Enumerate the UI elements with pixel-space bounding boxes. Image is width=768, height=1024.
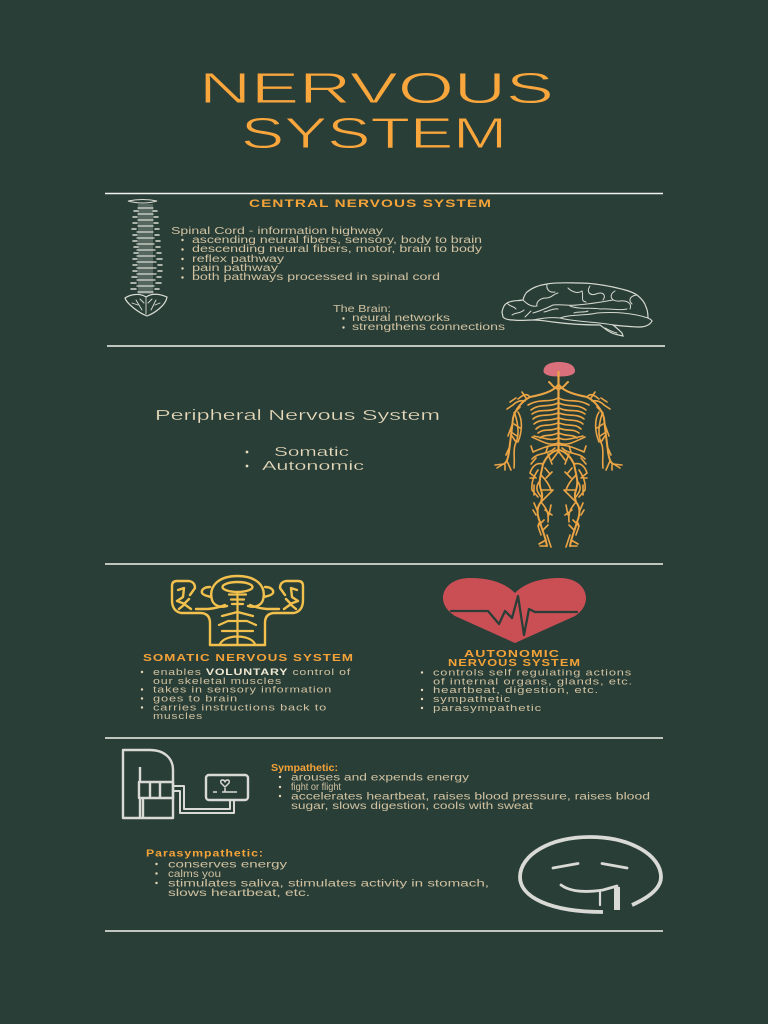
list: somatic and autonomic: Somatic (274, 444, 350, 459)
list: autonomic details: heartbeat, digestion, etc. (433, 685, 599, 696)
list: somatic and autonomic (246, 444, 365, 473)
list: sympathetic details: arouses and expends energy (291, 772, 469, 784)
list: sympathetic details: fight or flight (291, 781, 341, 793)
text block: spinal cord: pain pathway (192, 263, 278, 274)
icon: brain (502, 283, 652, 336)
icon: body nervous system (495, 362, 622, 547)
list: sympathetic details: accelerates heartbeat, raises blood pressure, raises blood (291, 792, 650, 802)
list: sympathetic details: sugar, slows digestion, cools with sweat (291, 801, 533, 812)
title (199, 64, 554, 158)
icon: drooling face (520, 837, 661, 912)
text block: the brain: strengthens connections (352, 322, 505, 333)
list: parasympathetic details (155, 860, 489, 899)
list: parasympathetic details: slows heartbeat, etc. (168, 888, 310, 899)
title: NERVOUS (199, 64, 554, 113)
list: parasympathetic details: stimulates saliva, stimulates activity in stomach, (168, 878, 489, 890)
panel: peripheral nervous system (155, 362, 622, 547)
icon: heart with heartbeat (443, 578, 586, 643)
panel: autonomic nervous system (421, 578, 633, 714)
icon: somatic body (172, 576, 303, 645)
text block: spinal cord: reflex pathway (192, 254, 284, 265)
text block: spinal cord: descending neural fibers, motor, brain to body (192, 244, 482, 255)
icon: medical machine (123, 750, 248, 818)
list: autonomic details: controls self regulating actions (433, 668, 632, 678)
heading: parasympathetic: Parasympathetic: (146, 848, 264, 860)
list: somatic details (141, 667, 351, 722)
list: parasympathetic details: calms you (168, 868, 221, 880)
heading: somatic nervous system: SOMATIC NERVOUS SYSTEM (143, 653, 354, 664)
title: SYSTEM (241, 109, 507, 158)
text block: the brain (333, 304, 505, 333)
text block: spinal cord: both pathways processed in spinal cord (192, 272, 440, 283)
heading: sympathetic: Sympathetic: (271, 763, 338, 774)
list: somatic details: enables VOLUNTARY control of (153, 667, 351, 678)
heading: autonomic nervous system: AUTONOMIC (464, 649, 560, 660)
list: autonomic details (421, 668, 633, 714)
panel: parasympathetic (146, 837, 661, 912)
panel: sympathetic (123, 750, 650, 818)
list: autonomic details: parasympathetic (433, 703, 542, 714)
list: somatic details: our skeletal muscles (153, 676, 282, 687)
icon: spine (125, 200, 167, 316)
list: somatic and autonomic: Autonomic (262, 458, 365, 473)
list: somatic details: takes in sensory information (153, 684, 332, 696)
list: somatic details: carries instructions back to (153, 702, 327, 714)
list: autonomic details: sympathetic (433, 694, 511, 705)
heading: autonomic nervous system: NERVOUS SYSTEM (448, 658, 581, 669)
heading: peripheral nervous system: Peripheral Nervous System (155, 408, 440, 424)
list: sympathetic details (279, 772, 650, 812)
list: parasympathetic details: conserves energy (168, 860, 287, 870)
text block: spinal cord (171, 226, 482, 283)
text block: the brain: neural networks (352, 313, 450, 324)
panel: central nervous system (125, 198, 652, 336)
heading: autonomic nervous system (448, 649, 581, 669)
panel: somatic nervous system (141, 576, 354, 722)
list: autonomic details: of internal organs, glands, etc. (433, 676, 633, 688)
text block: spinal cord: ascending neural fibers, sensory, body to brain (192, 235, 482, 246)
text block: spinal cord: Spinal Cord - information highway (171, 226, 383, 237)
heading: central nervous system: CENTRAL NERVOUS SYSTEM (249, 198, 492, 210)
list: somatic details: muscles (153, 711, 203, 722)
text block: the brain: The Brain: (333, 304, 391, 315)
list: somatic details: goes to brain (153, 694, 238, 704)
